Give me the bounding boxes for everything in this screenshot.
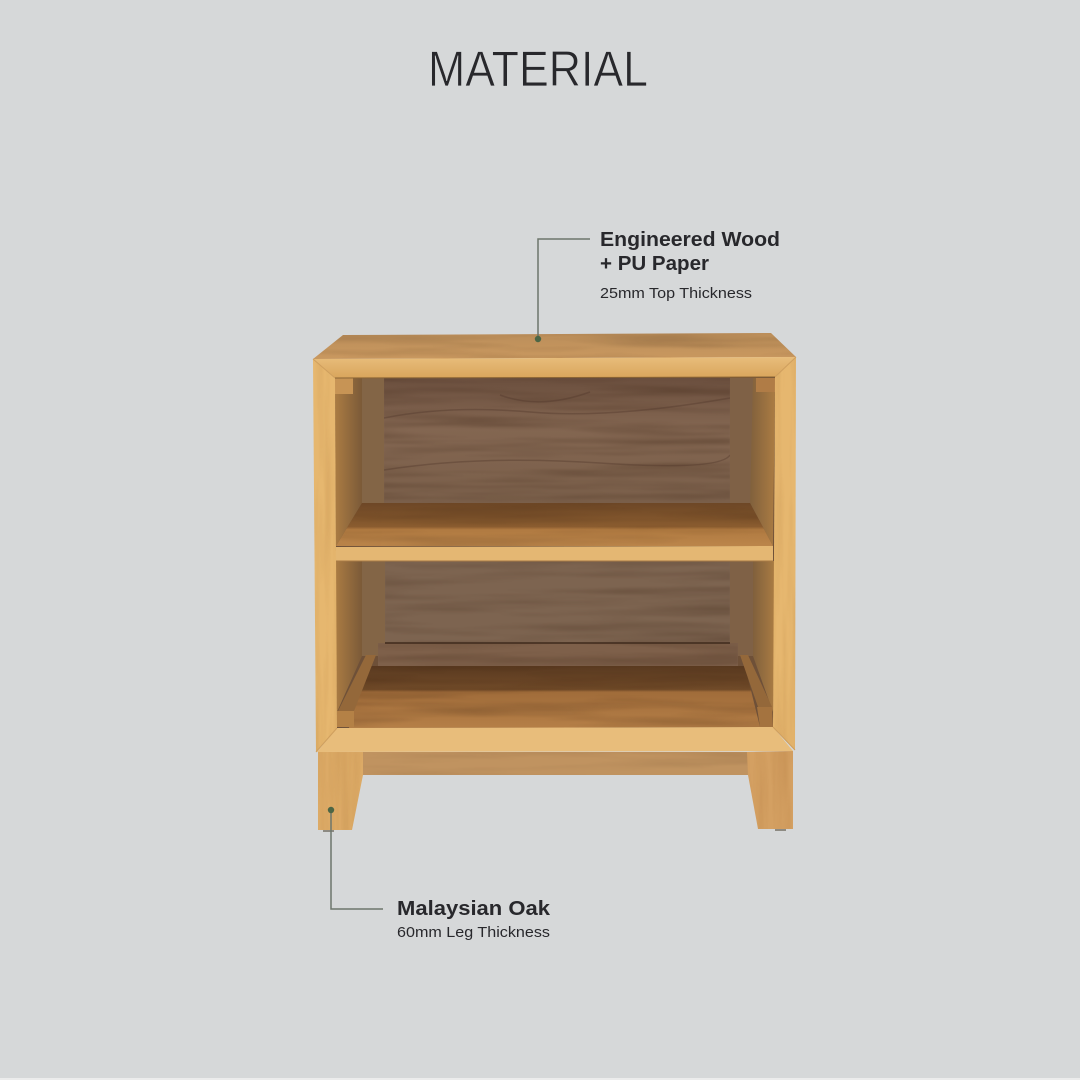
- heading: Malaysian Oak: [397, 898, 551, 920]
- heading second line: + PU Paper: [600, 253, 709, 275]
- right leg: [747, 751, 793, 831]
- thickness note: 25mm Top Thickness: [600, 285, 752, 302]
- furniture: oak cabinet: [313, 333, 796, 832]
- marker dot: [535, 336, 541, 342]
- leader line: [331, 810, 383, 909]
- middle shelf: [336, 503, 774, 561]
- marker dot: [328, 807, 334, 813]
- under rail: [362, 752, 748, 775]
- thickness note: 60mm Leg Thickness: [397, 924, 550, 941]
- lower plinth and floor: [337, 643, 773, 728]
- callout: malaysian oak: [328, 807, 551, 941]
- cabinet interior: [335, 377, 775, 729]
- leader line: [538, 239, 590, 339]
- title: MATERIAL: [428, 41, 648, 97]
- top panel: [313, 333, 796, 359]
- front frame: [313, 357, 796, 752]
- left leg: [318, 752, 363, 832]
- heading: Engineered Wood: [600, 229, 780, 251]
- callout: engineered wood: [535, 229, 780, 342]
